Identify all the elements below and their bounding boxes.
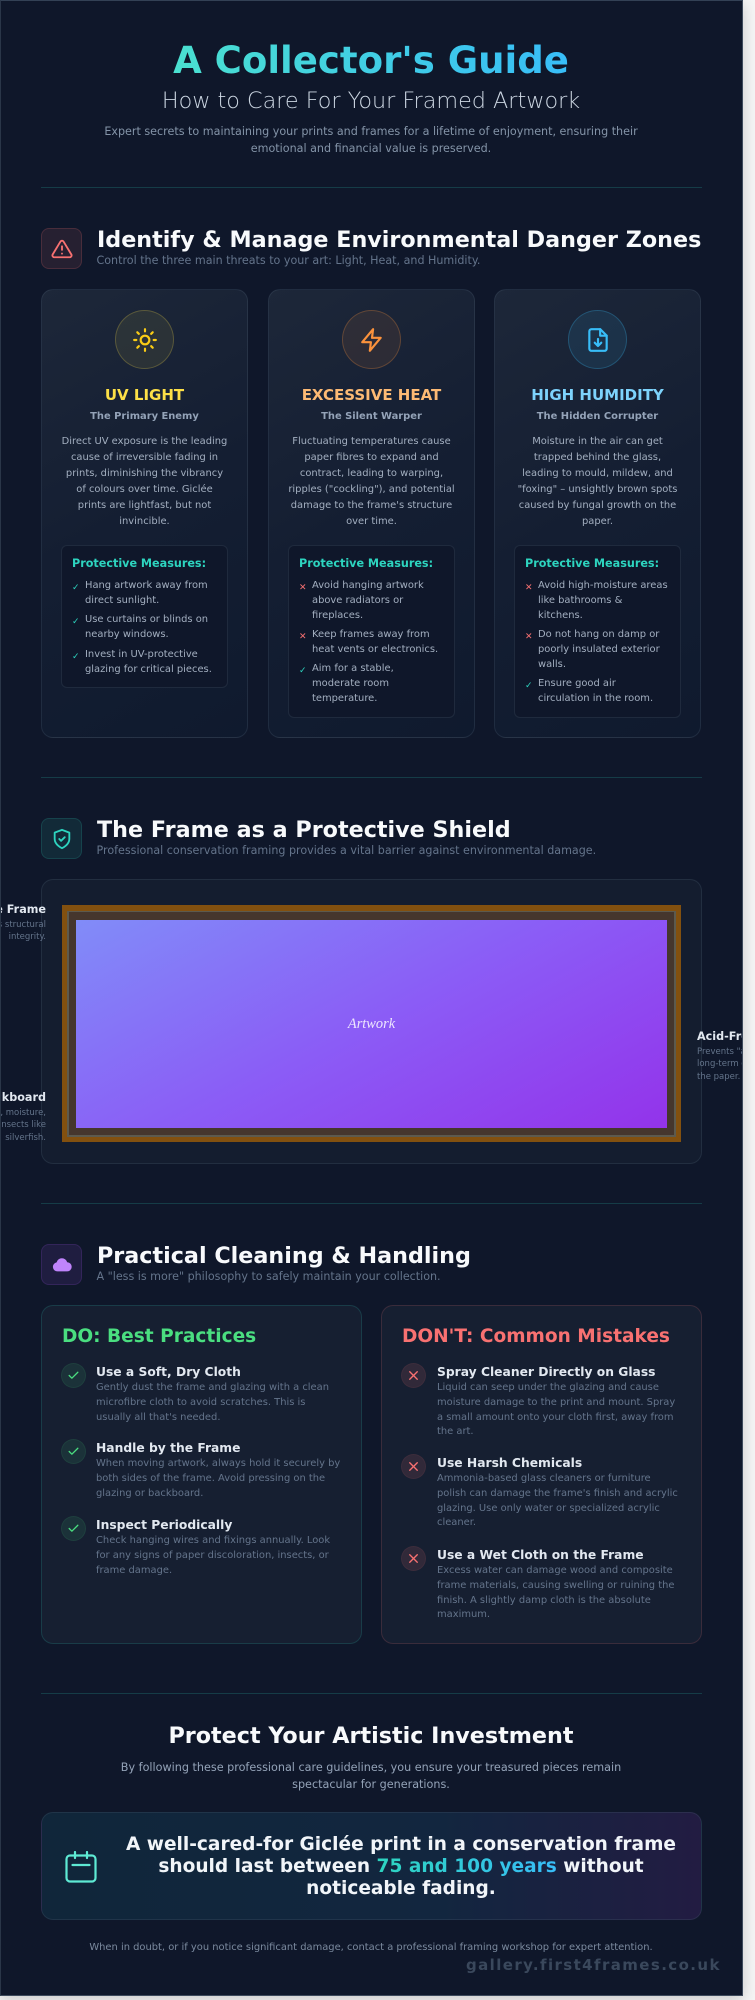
icon: cross: [401, 1546, 426, 1571]
item title: Inspect Periodically: [96, 1518, 232, 1532]
item: handle: [61, 1439, 340, 1499]
panel: high humidity: kitchens.: [538, 610, 583, 621]
item text: [96, 1382, 329, 1423]
item title: Use Harsh Chemicals: [437, 1456, 582, 1470]
callout text: noticeable fading.: [306, 1878, 496, 1899]
panel: high humidity: circulation in the room.: [538, 693, 653, 704]
panel: don't: [381, 1305, 702, 1644]
item text: Excess water can damage wood and composite: [437, 1565, 673, 1576]
label description: the paper.: [697, 1072, 740, 1082]
item text: When moving artwork, always hold it securely by: [96, 1458, 340, 1469]
closing text: By following these professional care guidelines, you ensure your treasured pieces remain: [121, 1761, 621, 1774]
card subtitle: The Silent Warper: [321, 411, 422, 422]
panel: high humidity: like bathrooms &: [538, 595, 622, 606]
artwork: Artwork: [348, 1016, 395, 1032]
item text: both sides of the frame. Avoid pressing on the: [96, 1473, 325, 1484]
label description: [0, 1108, 46, 1143]
panel: UV light: ✓: [72, 617, 80, 627]
item text: cleaner.: [437, 1517, 476, 1528]
icon: cross: [401, 1454, 426, 1479]
panel background: [41, 1305, 362, 1644]
card body: caused by fungal growth on the: [519, 500, 676, 511]
card title: EXCESSIVE HEAT: [302, 386, 441, 404]
item text: glazing or backboard.: [96, 1488, 203, 1499]
label: acid-free mount: [697, 1030, 743, 1082]
item text: microfibre cloth to avoid scratches. This is: [96, 1397, 305, 1408]
label: backboard: [0, 1091, 46, 1143]
label: frame: [0, 903, 46, 942]
panel heading: DO: Best Practices: [62, 1326, 256, 1347]
item: inspect: [61, 1516, 330, 1576]
section: protective shield: [41, 817, 596, 859]
card body: Direct UV exposure is the leading: [62, 436, 227, 447]
subtitle: How to Care For Your Framed Artwork: [162, 88, 580, 114]
label description: [697, 1047, 743, 1082]
panel: excessive heat: ✓: [299, 666, 307, 676]
frame diagram panel: [41, 879, 702, 1164]
panel heading: DON'T: Common Mistakes: [402, 1326, 670, 1347]
panel: high humidity: Avoid high-moisture areas: [538, 580, 668, 591]
panel: UV light: nearby windows.: [85, 629, 169, 640]
callout text: A well-cared-for Giclée print in a conservation frame: [126, 1834, 676, 1855]
card body: cause of irreversible fading in: [71, 452, 218, 463]
card body: prints, diminishing the vibrancy: [66, 468, 223, 479]
mount board: [68, 912, 674, 1135]
card body: leading to mould, mildew, and: [522, 468, 673, 479]
card body: trapped behind the glass,: [534, 452, 661, 463]
item text: maximum.: [437, 1609, 490, 1620]
measures heading: Protective Measures:: [525, 557, 659, 570]
icon: document with drop: [568, 310, 627, 369]
card body: contract, leading to warping,: [300, 468, 443, 479]
icon: lightning: [342, 310, 401, 369]
panel: high humidity: poorly insulated exterior: [538, 644, 660, 655]
panel: UV light: Hang artwork away from: [85, 580, 208, 591]
measures heading: Protective Measures:: [72, 557, 206, 570]
card title: HIGH HUMIDITY: [531, 386, 664, 404]
frame diagram: [62, 905, 681, 1142]
card subtitle: The Hidden Corrupter: [537, 411, 658, 422]
icon: cloud: [41, 1244, 82, 1285]
item text: usually all that's needed.: [96, 1412, 220, 1423]
item text: [96, 1535, 330, 1576]
card subtitle: The Primary Enemy: [90, 411, 199, 422]
item title: Handle by the Frame: [96, 1441, 240, 1455]
item: soft cloth: [61, 1363, 329, 1423]
intro text: [104, 125, 638, 155]
intro text: emotional and financial value is preserved.: [251, 142, 491, 155]
panel: UV light: Use curtains or blinds on: [85, 614, 208, 625]
card body: "foxing" – unsightly brown spots: [518, 484, 677, 495]
heading: cleaning: Practical Cleaning & Handling: [97, 1243, 471, 1269]
item text: [437, 1382, 675, 1437]
panel: high humidity: [494, 289, 701, 738]
panel: do: [41, 1305, 362, 1644]
card body: paper fibres to expand and: [304, 452, 439, 463]
panel: excessive heat: temperature.: [312, 693, 377, 704]
card background: [41, 289, 248, 738]
item text: a small amount onto your cloth first, away from: [437, 1412, 674, 1423]
item text: moisture damage to the print and mount. Spray: [437, 1397, 675, 1408]
section: cleaning: [41, 1243, 471, 1285]
item text: [96, 1458, 340, 1499]
item text: frame materials, causing swelling or ruining the: [437, 1580, 674, 1591]
item: chemicals: [401, 1454, 678, 1528]
panel: high humidity: ✓: [525, 681, 533, 691]
panel: UV light: ✓: [72, 583, 80, 593]
panel: excessive heat: Aim for a stable,: [312, 663, 394, 674]
item text: polish can damage the frame's finish and acrylic: [437, 1488, 678, 1499]
icon: calendar: [65, 1851, 97, 1883]
item text: [437, 1473, 678, 1528]
panel: excessive heat: Keep frames away from: [312, 629, 430, 640]
card body: prints are lightfast, but not: [78, 500, 211, 511]
callout banner: [41, 1812, 702, 1920]
item title: Spray Cleaner Directly on Glass: [437, 1365, 656, 1379]
item text: finish. A slightly damp cloth is the absolute: [437, 1595, 651, 1606]
card body: paper.: [582, 516, 613, 527]
label description: [0, 920, 46, 942]
item text: the art.: [437, 1426, 474, 1437]
panel: UV light: ✓: [72, 652, 80, 662]
protective measures box: [61, 545, 228, 688]
footer note: When in doubt, or if you notice significant damage, contact a professional framing workshop for expert attention.: [89, 1942, 653, 1953]
title: A Collector's Guide: [173, 39, 569, 82]
item text: Gently dust the frame and glazing with a clean: [96, 1382, 329, 1393]
heading: danger zones: Identify & Manage Environmental Danger Zones: [97, 227, 701, 253]
panel: UV light: [41, 289, 248, 738]
artwork: [76, 920, 667, 1128]
card body: Fluctuating temperatures cause: [292, 436, 451, 447]
panel: excessive heat: above radiators or: [312, 595, 403, 606]
panel: excessive heat: moderate room: [312, 678, 389, 689]
item title: Use a Wet Cloth on the Frame: [437, 1548, 644, 1562]
card background: [494, 289, 701, 738]
callout text: [126, 1834, 676, 1899]
item: spray: [401, 1363, 675, 1437]
card body: invincible.: [119, 516, 170, 527]
icon: check: [61, 1516, 86, 1541]
panel: high humidity: walls.: [538, 659, 566, 670]
protective measures box: [514, 545, 681, 718]
watermark: gallery.first4frames.co.uk: [466, 1956, 721, 1974]
card body: [288, 436, 455, 527]
panel: UV light: glazing for critical pieces.: [85, 664, 212, 675]
intro text: Expert secrets to maintaining your prints and frames for a lifetime of enjoyment, ensuring their: [104, 125, 638, 138]
heading: protective shield: The Frame as a Protective Shield: [97, 817, 511, 843]
protective measures box: [288, 545, 455, 718]
panel: high humidity: ✕: [525, 583, 533, 593]
panel background: [381, 1305, 702, 1644]
measure items: [525, 580, 668, 704]
panel: UV light: Invest in UV-protective: [85, 649, 198, 660]
item text: [437, 1565, 674, 1620]
callout text: should last between 75 and 100 years without: [158, 1856, 644, 1877]
measure items: [299, 580, 438, 704]
icon: sun: [115, 310, 174, 369]
card body: Moisture in the air can get: [532, 436, 663, 447]
glazing edge: [67, 910, 676, 1136]
item title: Use a Soft, Dry Cloth: [96, 1365, 241, 1379]
card body: over time.: [346, 516, 397, 527]
card body: [62, 436, 227, 527]
item text: Check hanging wires and fixings annually. Look: [96, 1535, 330, 1546]
item text: glazing. Use only water or specialized acrylic: [437, 1503, 660, 1514]
icon: warning triangle: [41, 228, 82, 269]
section subtitle: A "less is more" philosophy to safely maintain your collection.: [96, 1270, 441, 1283]
measures heading: Protective Measures:: [299, 557, 433, 570]
panel: excessive heat: ✕: [299, 632, 307, 642]
panel: excessive heat: [268, 289, 475, 738]
item: wet cloth: [401, 1546, 674, 1620]
card body: of colours over time. Giclée: [76, 484, 213, 495]
panel: high humidity: Do not hang on damp or: [538, 629, 659, 640]
card title: UV LIGHT: [105, 386, 184, 404]
item text: frame damage.: [96, 1565, 172, 1576]
measure items: [72, 580, 212, 675]
card body: [518, 436, 677, 527]
card background: [268, 289, 475, 738]
card body: ripples ("cockling"), and potential: [288, 484, 455, 495]
label description: integrity.: [9, 932, 46, 942]
section subtitle: Control the three main threats to your art: Light, Heat, and Humidity.: [96, 254, 480, 267]
icon: check: [61, 1439, 86, 1464]
panel: high humidity: ✕: [525, 632, 533, 642]
panel: UV light: direct sunlight.: [85, 595, 159, 606]
panel: excessive heat: ✕: [299, 583, 307, 593]
closing heading: Protect Your Artistic Investment: [168, 1723, 574, 1749]
item text: Ammonia-based glass cleaners or furniture: [437, 1473, 651, 1484]
panel: excessive heat: fireplaces.: [312, 610, 363, 621]
panel: high humidity: Ensure good air: [538, 678, 616, 689]
icon: cross: [401, 1363, 426, 1388]
icon: check: [61, 1363, 86, 1388]
icon: shield: [41, 818, 82, 859]
label description: silverfish.: [5, 1133, 46, 1143]
panel: excessive heat: Avoid hanging artwork: [312, 580, 424, 591]
section: danger zones: [41, 227, 701, 269]
item text: for any signs of paper discoloration, insects, or: [96, 1550, 329, 1561]
item text: Liquid can seep under the glazing and cause: [437, 1382, 659, 1393]
card body: damage to the frame's structure: [291, 500, 452, 511]
closing text: [121, 1761, 621, 1791]
panel: excessive heat: heat vents or electronics.: [312, 644, 438, 655]
closing text: spectacular for generations.: [292, 1778, 450, 1791]
section subtitle: Professional conservation framing provides a vital barrier against environmental damage.: [96, 844, 596, 857]
